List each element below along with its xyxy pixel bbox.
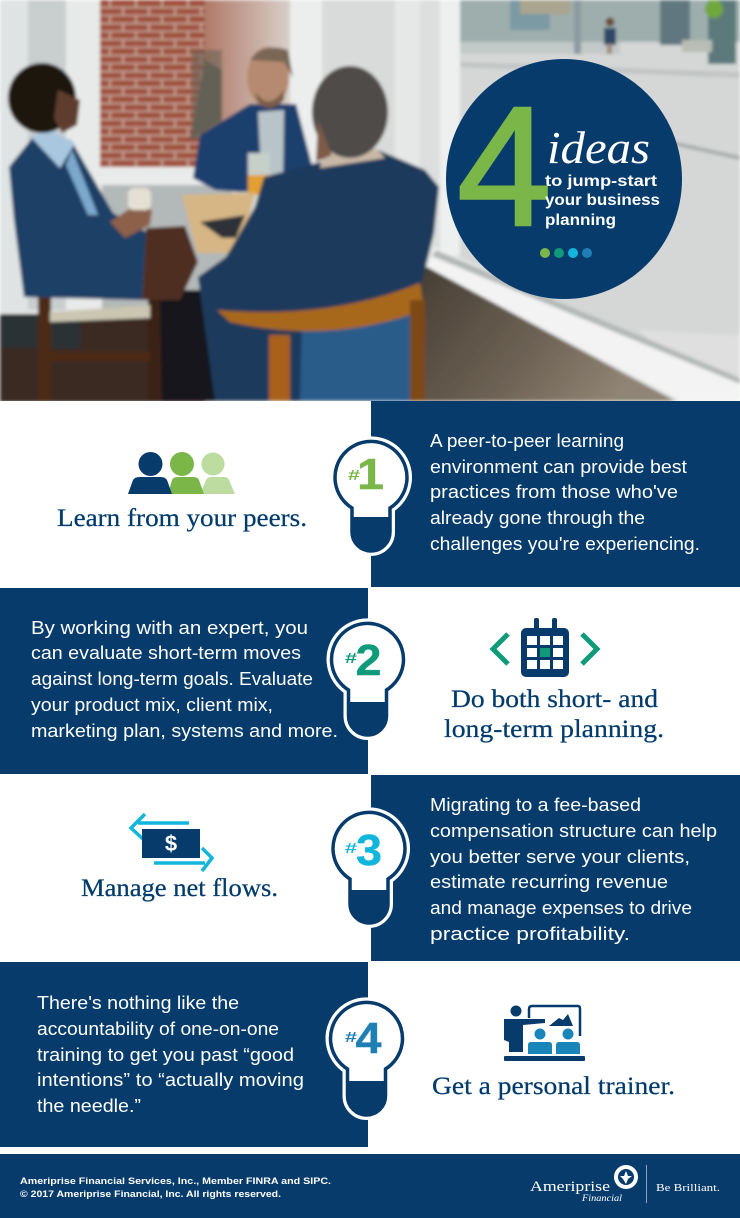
- word: ideas: ideas: [547, 122, 650, 173]
- heading: Manage net flows.: [81, 875, 278, 902]
- panel: idea 1: [0, 401, 740, 587]
- body text: training to get you past “good: [37, 1045, 294, 1065]
- icon: light bulb #3: #: [345, 840, 358, 857]
- panel: idea 4: [0, 962, 675, 1147]
- icon: light bulb #4: #: [345, 1029, 358, 1046]
- navy text panel: [0, 588, 368, 774]
- body text: environment can provide best: [430, 457, 687, 477]
- title badge: [446, 59, 682, 299]
- legal text: © 2017 Ameriprise Financial, Inc. All rights reserved.: [20, 1189, 281, 1200]
- body text: [31, 618, 338, 741]
- body text: can evaluate short-term moves: [31, 643, 301, 663]
- icon: net flows money arrows: [131, 814, 212, 871]
- badge subtitle: [545, 173, 660, 229]
- icon: net flows money arrows: $: [165, 831, 177, 856]
- body text: practices from those who've: [430, 482, 678, 502]
- body text: already gone through the: [430, 508, 645, 528]
- navy text panel: [371, 401, 740, 587]
- navy text panel: [371, 775, 740, 961]
- panel: idea 2: [0, 588, 664, 774]
- body text: marketing plan, systems and more.: [31, 721, 338, 741]
- logo: Ameriprise Financial: Ameriprise: [530, 1179, 610, 1195]
- icon: light bulb #1: #: [348, 467, 361, 484]
- body text: intentions” to “actually moving: [37, 1070, 304, 1090]
- icon: light bulb #1: 1: [357, 450, 384, 499]
- navy text panel: [0, 962, 368, 1147]
- body text: accountability of one-on-one: [37, 1019, 279, 1039]
- logo divider: [646, 1165, 647, 1203]
- badge subtitle: planning: [545, 212, 616, 229]
- icon: light bulb #3: [333, 812, 405, 923]
- body text: your product mix, client mix,: [31, 695, 273, 715]
- body text: against long-term goals. Evaluate: [31, 669, 313, 689]
- logo: Ameriprise Financial: Financial: [581, 1193, 623, 1203]
- body text: By working with an expert, you: [31, 618, 308, 638]
- badge circle: [446, 59, 682, 299]
- white half: [0, 401, 371, 587]
- body text: There's nothing like the: [37, 993, 239, 1013]
- icon: light bulb #4: 4: [356, 1014, 382, 1063]
- footer: [0, 1154, 740, 1218]
- body text: [430, 431, 700, 554]
- heading: Get a personal trainer.: [432, 1073, 675, 1100]
- heading: [444, 686, 664, 743]
- icon: light bulb #2: #: [345, 650, 358, 667]
- panel: idea 3: [81, 775, 740, 961]
- body text: the needle.”: [37, 1096, 141, 1116]
- body text: compensation structure can help: [430, 821, 717, 841]
- hero photo: meeting at a cafe window: [0, 0, 740, 402]
- body text: challenges you're experiencing.: [430, 534, 700, 554]
- body text: you better serve your clients,: [430, 847, 690, 867]
- icon: light bulb #2: 2: [356, 636, 382, 685]
- body text: practice profitability.: [430, 924, 630, 944]
- body text: and manage expenses to drive: [430, 898, 692, 918]
- icon: calendar with chevrons: [493, 618, 597, 677]
- body text: [37, 993, 304, 1116]
- body text: A peer-to-peer learning: [430, 431, 624, 451]
- footer bar: [0, 1154, 740, 1218]
- body text: [430, 795, 717, 944]
- icon: light bulb #2: [332, 623, 404, 735]
- body text: Migrating to a fee-based: [430, 795, 641, 815]
- body text: estimate recurring revenue: [430, 872, 668, 892]
- tagline: Be Brilliant.: [656, 1182, 720, 1194]
- icon: light bulb #1: [335, 441, 407, 551]
- logo: Ameriprise Financial: [530, 1167, 636, 1203]
- heading: Do both short- and: [451, 686, 659, 713]
- legal text: Ameriprise Financial Services, Inc., Member FINRA and SIPC.: [20, 1176, 331, 1187]
- icon: light bulb #3: 3: [356, 826, 382, 875]
- icon: trainer at board: [504, 1006, 585, 1061]
- big numeral 4: 4: [457, 72, 552, 262]
- badge subtitle: your business: [545, 192, 660, 209]
- heading: Learn from your peers.: [57, 505, 307, 532]
- four colored dots: [540, 248, 592, 258]
- badge subtitle: to jump-start: [545, 173, 657, 190]
- heading: long-term planning.: [444, 716, 664, 743]
- icon: three peers: [128, 452, 235, 494]
- icon: light bulb #4: [330, 1002, 402, 1115]
- legal text: [20, 1176, 331, 1200]
